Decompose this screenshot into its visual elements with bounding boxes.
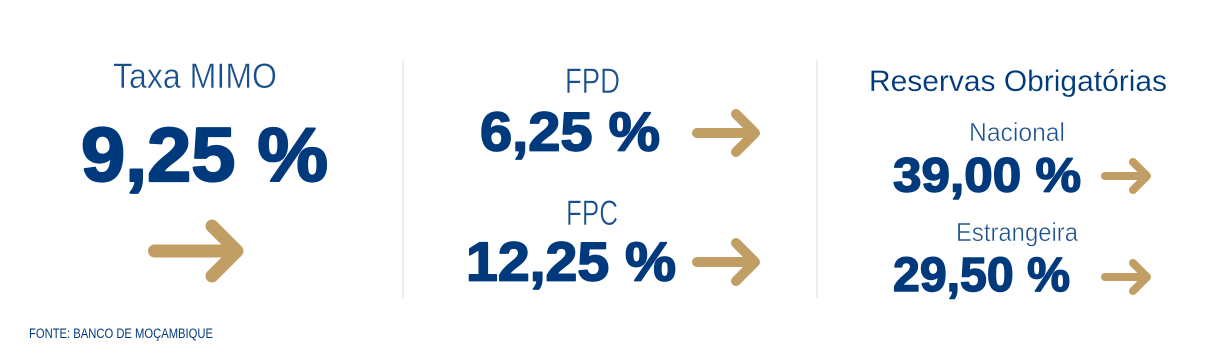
label: Estrangeira: Estrangeira bbox=[956, 217, 1078, 247]
value: 6,25 %: 6,25 % bbox=[480, 100, 660, 162]
icon: arrow right bbox=[154, 226, 237, 276]
panel: Taxa MIMO bbox=[81, 57, 328, 276]
heading: FPD: FPD bbox=[565, 62, 620, 101]
label: Nacional: Nacional bbox=[969, 117, 1065, 147]
icon: arrow right bbox=[697, 114, 755, 152]
heading: Taxa MIMO: Taxa MIMO bbox=[113, 57, 277, 96]
heading: FPC: FPC bbox=[566, 194, 618, 233]
panel: FPD and FPC bbox=[466, 62, 755, 292]
value: 12,25 %: 12,25 % bbox=[466, 230, 676, 292]
icon: arrow right bbox=[1105, 263, 1147, 291]
source note: FONTE: BANCO DE MOÇAMBIQUE bbox=[29, 326, 213, 341]
heading: Reservas Obrigatórias: Reservas Obrigatórias bbox=[869, 65, 1167, 98]
value: 29,50 %: 29,50 % bbox=[893, 249, 1070, 302]
value: 9,25 %: 9,25 % bbox=[81, 113, 328, 198]
icon: arrow right bbox=[1105, 162, 1147, 190]
value: 39,00 %: 39,00 % bbox=[893, 150, 1081, 202]
panel: Reservas Obrigatórias bbox=[869, 65, 1167, 302]
icon: arrow right bbox=[697, 243, 755, 281]
